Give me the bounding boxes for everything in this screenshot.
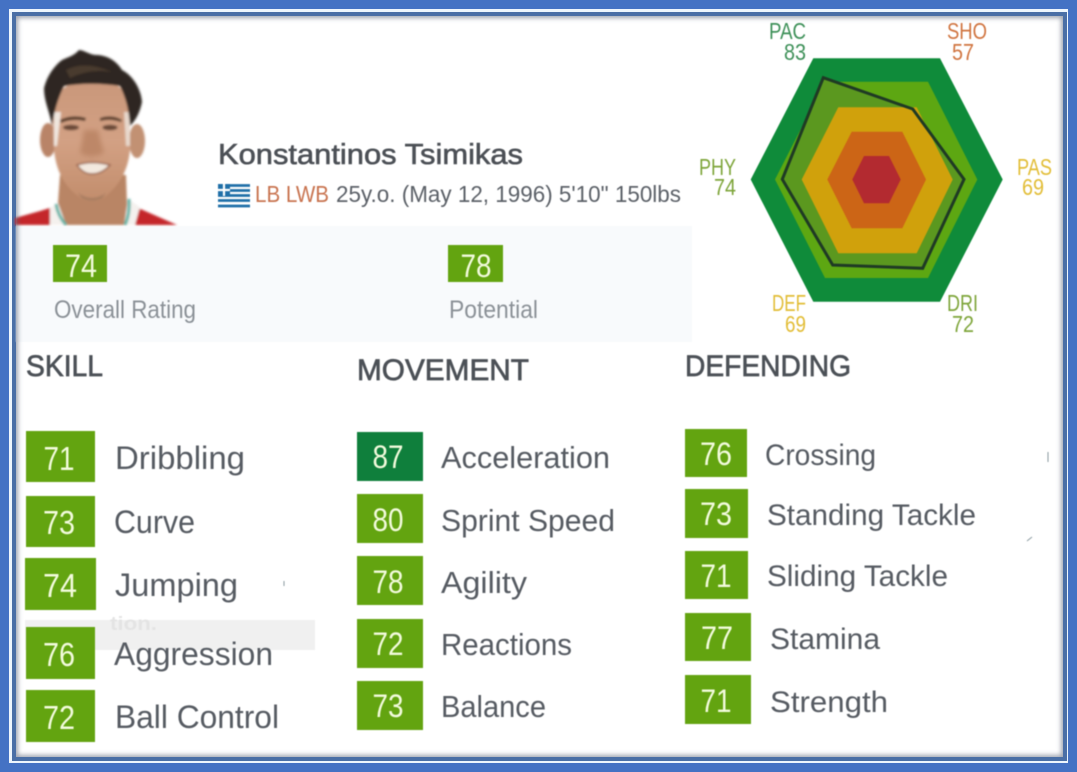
stat: Ball Control	[26, 690, 279, 742]
shirt	[15, 207, 177, 225]
faded caption strip: tion.	[110, 614, 157, 635]
potential label: Potential	[449, 296, 538, 324]
label: PAC	[769, 18, 806, 65]
stat: Crossing: Crossing	[765, 439, 876, 472]
stat: Balance: 73	[372, 688, 404, 724]
stat: Sprint Speed	[357, 494, 615, 543]
label: PAS: PAS	[1017, 154, 1052, 180]
stat: Jumping	[25, 558, 238, 610]
player portrait	[15, 50, 177, 225]
hexagon band: light green	[775, 82, 977, 278]
label: SHO: 57	[952, 39, 974, 65]
mouth	[77, 162, 110, 174]
face	[52, 80, 130, 201]
label: DRI: 72	[952, 311, 974, 337]
stat: Curve: Curve	[114, 504, 195, 540]
collar	[50, 199, 140, 225]
stat: Reactions	[357, 619, 572, 668]
hair	[44, 50, 142, 126]
age, birth date, height and weight: 25y.o. (May 12, 1996) 5'10" 150lbs	[336, 181, 681, 207]
stat: Crossing	[685, 429, 876, 477]
overall rating badge: 74	[65, 248, 97, 284]
stat: Stamina	[685, 613, 880, 661]
stat: Strength: Strength	[770, 686, 888, 719]
stat: Balance: Balance	[441, 689, 546, 724]
hexagon band: yellow	[802, 107, 953, 253]
stat: Curve	[26, 496, 195, 547]
stat: Stamina: Stamina	[770, 623, 880, 656]
player details line	[218, 181, 681, 208]
panel: movement	[357, 354, 615, 730]
stat: Ball Control: Ball Control	[115, 699, 279, 735]
stat: Agility	[357, 556, 528, 605]
label: DRI: DRI	[947, 290, 978, 316]
stat: Curve: 73	[43, 504, 75, 541]
stat: Standing Tackle: Standing Tackle	[767, 499, 976, 532]
panel: ratings	[16, 226, 692, 342]
stat: Sliding Tackle: 71	[700, 558, 732, 594]
player stat outline	[782, 78, 964, 268]
panel: skill	[25, 350, 315, 742]
heading: movement: MOVEMENT	[357, 354, 529, 387]
stat: Reactions: Reactions	[441, 627, 572, 662]
ears	[40, 123, 56, 157]
stat: Aggression	[26, 627, 273, 679]
potential badge: 78	[460, 248, 492, 284]
icon: Greek flag	[218, 184, 250, 208]
panel: defending	[685, 350, 976, 724]
stat: Reactions: 72	[372, 626, 404, 662]
hair highlights	[66, 65, 112, 78]
stat: Acceleration: 87	[372, 439, 404, 475]
label: PAS: 69	[1022, 174, 1044, 200]
stubble	[78, 193, 106, 200]
stat: Acceleration: Acceleration	[441, 440, 610, 475]
stat: Stamina: 77	[701, 620, 733, 656]
positions: LB LWB	[255, 181, 329, 207]
stat: Agility: Agility	[441, 565, 528, 600]
stat: Aggression: 76	[43, 636, 75, 673]
label: PHY: PHY	[699, 154, 736, 180]
label: SHO	[947, 18, 987, 65]
stat: Acceleration	[357, 432, 610, 481]
label: DEF: DEF	[772, 290, 806, 316]
hexagon band: orange	[827, 132, 926, 228]
label: DRI	[947, 290, 978, 337]
stat: Sliding Tackle	[685, 551, 948, 599]
stat: Dribbling: 71	[44, 440, 74, 477]
stat: Jumping: 74	[43, 567, 77, 604]
stat: Ball Control: 72	[43, 699, 75, 736]
collar trim	[56, 204, 66, 225]
stat: Sprint Speed: 80	[372, 502, 404, 538]
label: PAC: PAC	[769, 18, 806, 44]
player stat area	[782, 78, 964, 268]
nose shadow	[80, 130, 104, 156]
stat: Agility: 78	[372, 564, 404, 600]
stat: Sprint Speed: Sprint Speed	[441, 503, 615, 538]
label: DEF	[772, 290, 806, 337]
stat: Dribbling	[26, 431, 245, 482]
stat: Standing Tackle: 73	[700, 496, 732, 532]
overall rating badge	[53, 245, 107, 284]
stat: Balance	[357, 681, 546, 730]
potential badge	[448, 245, 503, 284]
hexagon band: red	[852, 156, 901, 203]
stat: Sliding Tackle: Sliding Tackle	[767, 560, 948, 593]
label: DEF: 69	[785, 311, 806, 337]
radar chart	[699, 18, 1052, 337]
label: PHY	[699, 154, 736, 200]
face highlights	[54, 112, 61, 146]
eyebrows and eyes	[60, 116, 86, 123]
stat: Dribbling: Dribbling	[115, 440, 245, 476]
label: PHY: 74	[714, 174, 736, 200]
overall rating label: Overall Rating	[54, 296, 196, 324]
faded caption strip	[25, 614, 315, 650]
stat: Crossing: 76	[700, 436, 732, 472]
label: PAC: 83	[784, 39, 806, 65]
stat: Aggression: Aggression	[114, 636, 273, 672]
neck	[58, 175, 127, 225]
label: PAS	[1017, 154, 1052, 200]
hexagon band: outer green	[751, 58, 1003, 302]
heading: defending: DEFENDING	[685, 350, 851, 383]
stat: Strength: 71	[700, 683, 732, 719]
stat: Strength	[685, 675, 888, 724]
player name: Konstantinos Tsimikas	[218, 139, 523, 171]
heading: skill: SKILL	[26, 350, 103, 383]
stat: Jumping: Jumping	[115, 567, 238, 603]
stat: Standing Tackle	[685, 489, 976, 538]
label: SHO: SHO	[947, 18, 987, 44]
